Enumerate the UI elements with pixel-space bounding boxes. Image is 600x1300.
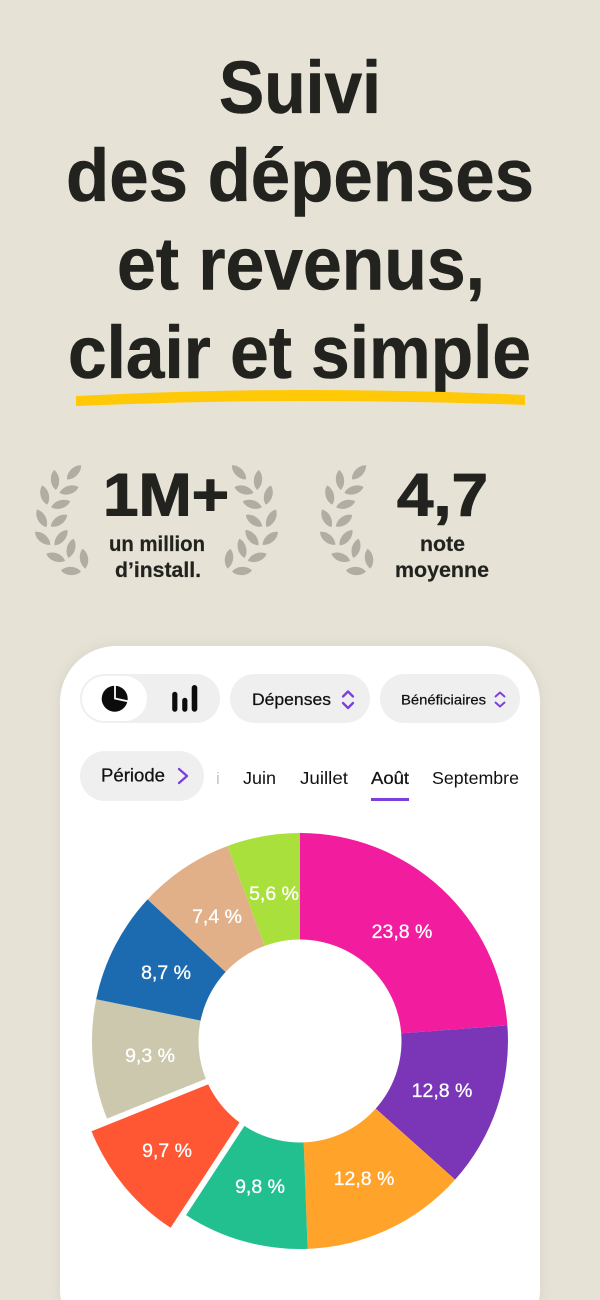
icon: chevron right (179, 769, 187, 783)
stat label: moyenne (395, 558, 489, 582)
icon: left laurel (317, 462, 374, 576)
slice labels: 5,6 % (249, 883, 299, 905)
title: Suivi (219, 46, 381, 129)
icon: up/down chevrons (496, 692, 504, 706)
slice labels: 12,8 % (412, 1080, 472, 1102)
slice labels: 9,3 % (125, 1045, 175, 1067)
icon: right laurel (224, 462, 281, 576)
slice labels: 9,7 % (142, 1140, 192, 1162)
slice labels: 23,8 % (372, 921, 432, 943)
dropdown: Bénéficiaires (380, 674, 520, 723)
slice 23,8 % (300, 833, 507, 1041)
month tabs: i (216, 769, 220, 788)
stat value: 4,7 (397, 462, 488, 528)
title: des dépenses (66, 134, 534, 217)
active tab underline (371, 798, 409, 801)
card shadow (58, 644, 542, 1300)
slice labels: 7,4 % (192, 906, 242, 928)
slice 12,8 % purple (300, 1025, 508, 1180)
button: Période: Période (101, 766, 165, 786)
stat label: d’install. (115, 558, 201, 582)
dropdown: Dépenses: Dépenses (252, 690, 331, 709)
icon: pie chart (102, 684, 129, 712)
chart type toggle (80, 674, 220, 723)
panel: phone screen (60, 646, 540, 1300)
slice labels: 9,8 % (235, 1176, 285, 1198)
month tabs: Juillet (300, 768, 348, 788)
icon: left laurel (32, 462, 89, 576)
icon: up/down chevrons (343, 692, 353, 708)
stat label: un million (109, 532, 205, 556)
month tabs: Août (371, 768, 409, 788)
stat label (109, 532, 205, 582)
donut hole (198, 940, 402, 1142)
slice 7,4 % (148, 846, 300, 1041)
donut chart (92, 833, 508, 1249)
button: Période (80, 751, 204, 801)
month tabs: Juin (243, 768, 276, 788)
stat value: 1M+ (103, 462, 229, 528)
slice 5,6 % (228, 833, 300, 1041)
stat label: note (420, 532, 465, 556)
title: clair et simple (68, 311, 531, 394)
slice labels: 12,8 % (334, 1168, 394, 1190)
dropdown: Dépenses (230, 674, 370, 723)
icon: bar chart (172, 685, 197, 712)
month tabs: Septembre (432, 768, 519, 788)
stat label (395, 532, 489, 582)
stat: installs (32, 462, 281, 582)
slice labels (125, 883, 472, 1198)
slice 9,3 % (92, 999, 300, 1119)
slice labels: 8,7 % (141, 962, 191, 984)
month tabs (216, 768, 519, 801)
title (66, 46, 534, 394)
dropdown: Bénéficiaires: Bénéficiaires (401, 692, 486, 708)
yellow underline (76, 390, 525, 406)
slice 12,8 % orange (300, 1041, 455, 1249)
slice 8,7 % (96, 899, 300, 1041)
title: et revenus, (117, 222, 485, 306)
stat: rating (317, 462, 600, 582)
slice 9,7 % exploded (92, 1054, 284, 1228)
slice 9,8 % (186, 1041, 308, 1249)
